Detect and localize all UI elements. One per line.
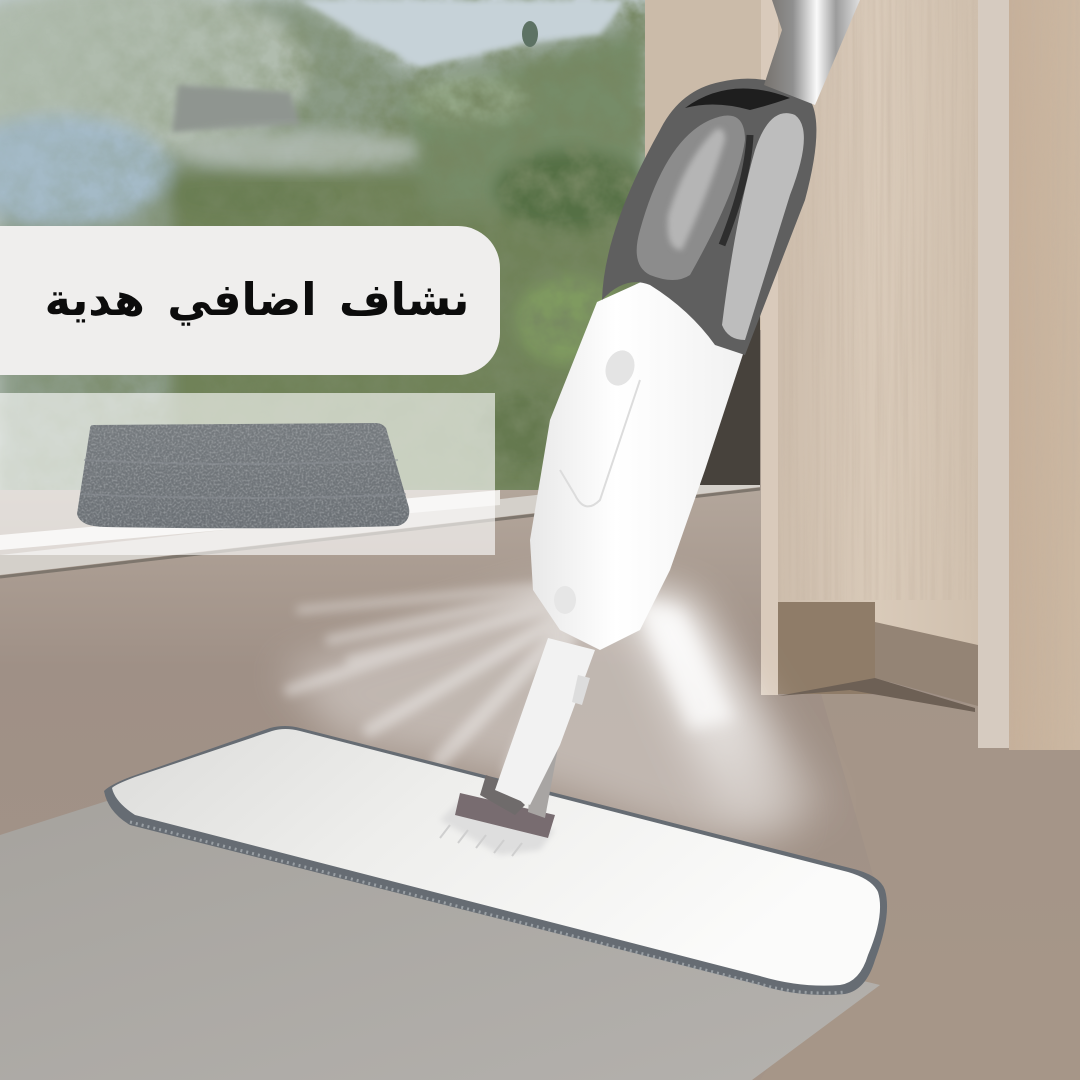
rug [0,800,880,1080]
title label pill [0,226,500,375]
icon: grey microfibre pad [77,423,410,528]
mop swivel joint [455,746,558,838]
title text: نشاف اضافي هدية [45,275,469,326]
cabinet panels [778,0,978,645]
mop neck [495,638,595,805]
reservoir: chrome tank [602,79,816,355]
floor [0,490,1080,1080]
wooden wall column and dark frame [645,0,761,330]
spray mist [280,585,830,845]
translucent extra pad panel [0,393,495,555]
mop body [530,278,745,650]
mop pad [104,726,887,995]
window view: hillside landscape [0,0,646,500]
mop handle pole [764,0,860,105]
